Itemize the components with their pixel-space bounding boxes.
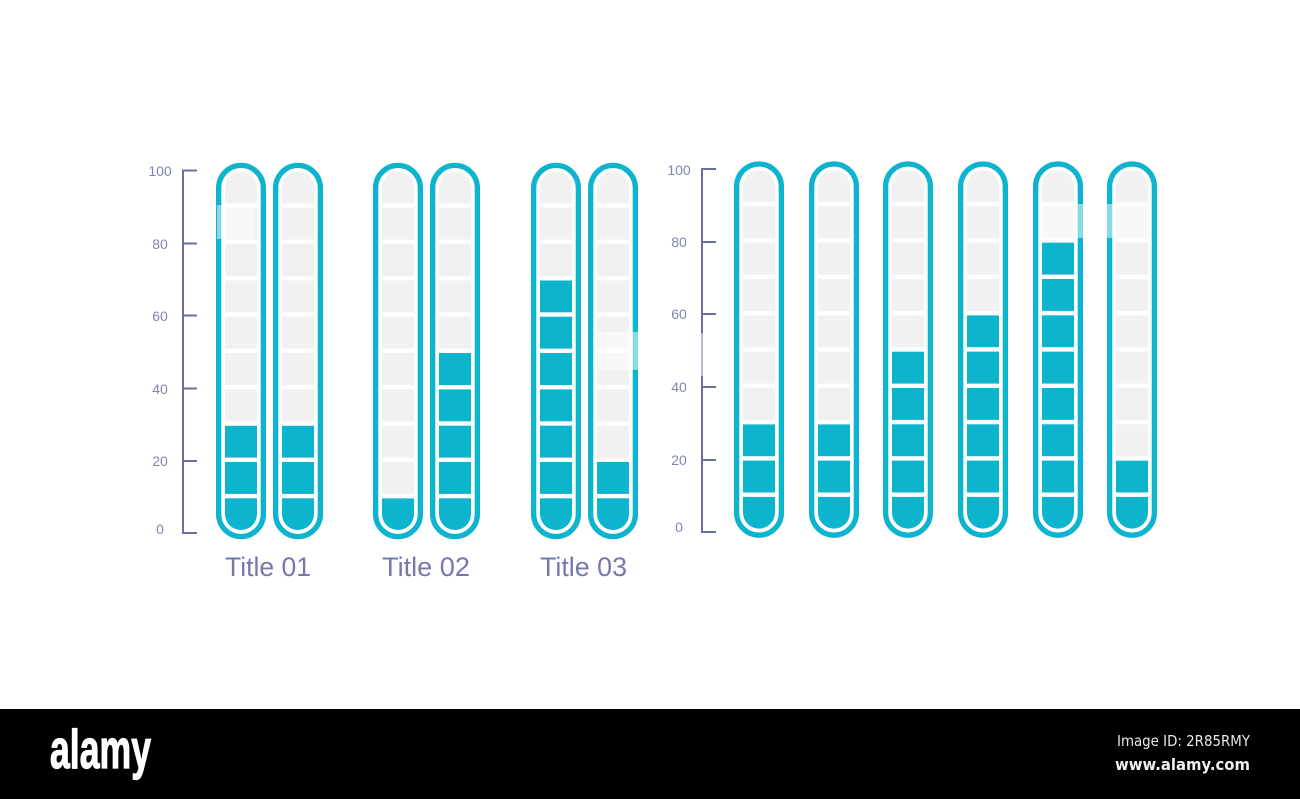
tube: group 2 bar 1, value 10 (376, 165, 420, 537)
tube: bar 4, value 60 (961, 164, 1005, 535)
logo: alamy: alamy (50, 718, 151, 780)
tube: group 1 bar 1, value 30 (219, 165, 263, 537)
tube: group 3 bar 2, value 20 (591, 165, 635, 537)
right axis (667, 162, 716, 535)
site url: www.alamy.com (1115, 755, 1250, 774)
tube: bar 5, value 80 (1036, 164, 1080, 535)
label: Title 02: Title 02 (382, 552, 470, 582)
label: Title 03: Title 03 (540, 552, 627, 582)
panel: left grouped chart (148, 163, 635, 582)
tube: bar 2, value 30 (812, 164, 856, 535)
left axis: 0 (156, 521, 164, 537)
right axis: 60 (671, 306, 687, 322)
tube: bar 1, value 30 (737, 164, 781, 535)
right axis: 40 (671, 379, 687, 395)
tube: bar 6, value 20 (1110, 164, 1154, 535)
tube: group 3 bar 1, value 70 (534, 165, 578, 537)
tube: group 1 bar 2, value 30 (276, 165, 320, 537)
right axis: 0 (675, 519, 683, 535)
image id: Image ID: 2R85RMY (1117, 732, 1251, 750)
left axis (148, 163, 197, 537)
left axis: 60 (152, 308, 168, 324)
footer bar (0, 709, 1300, 799)
right axis: 80 (671, 234, 687, 250)
watermark overlays (217, 204, 1150, 376)
label: Title 01: Title 01 (225, 552, 311, 582)
left axis: 100 (148, 163, 172, 179)
panel: right ungrouped chart (667, 162, 1154, 535)
left axis: 20 (152, 453, 168, 469)
tube: group 2 bar 2, value 50 (433, 165, 477, 537)
right axis: 100 (667, 162, 691, 178)
left axis: 80 (152, 236, 168, 252)
tube: bar 3, value 50 (886, 164, 930, 535)
left axis: 40 (152, 381, 168, 397)
right axis: 20 (671, 452, 687, 468)
